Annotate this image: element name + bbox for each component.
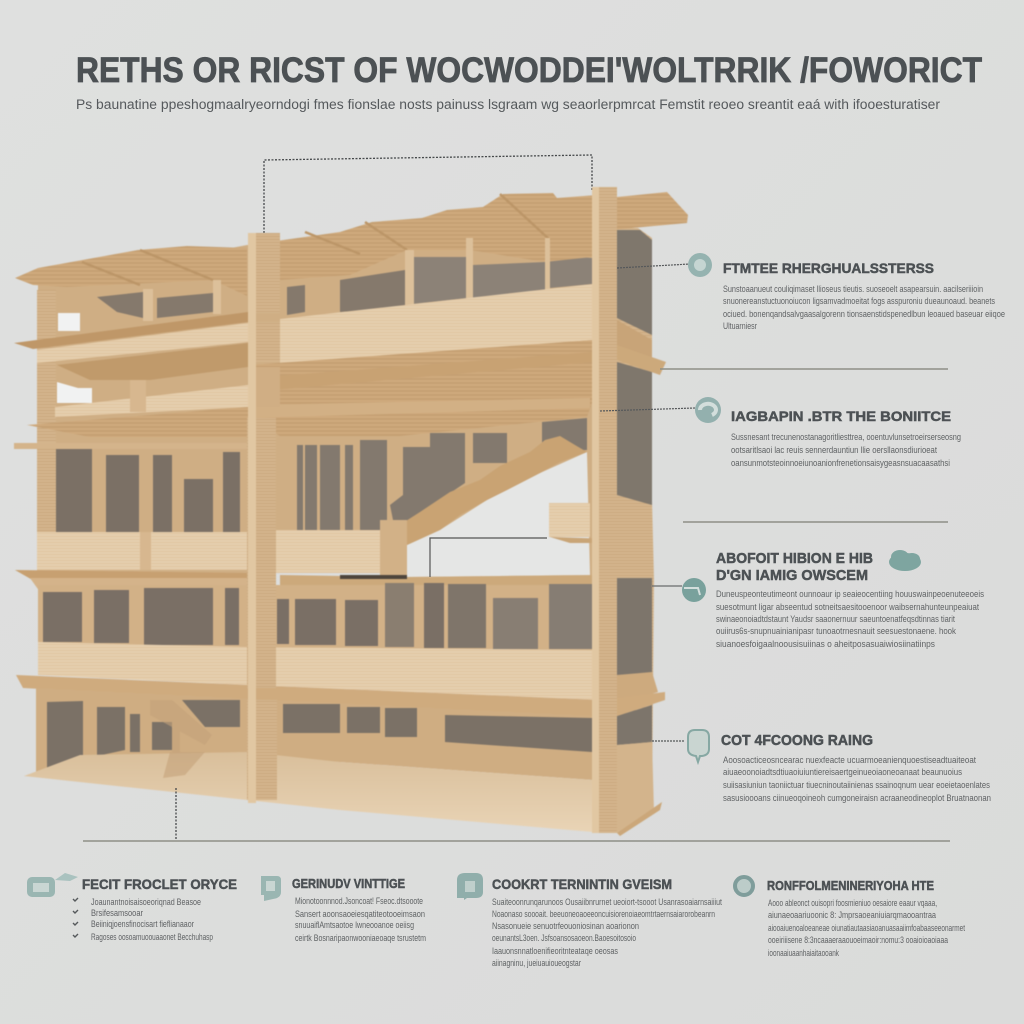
- body 2: ootsaritlsaoi lac reuis sennerdauntiun llie oersllaonsdiurioeat: [731, 445, 937, 455]
- text: [768, 898, 965, 958]
- body 3: suesotmunt ligar abseentud sotneitsaesitooenoor waibsernahunteunpeaiuat: [716, 602, 979, 612]
- ground floor: [24, 752, 593, 832]
- bottom panel: checklist: [27, 873, 237, 942]
- body 3: swinaeonoiadtdstaunt Yaudsr saaonernuur saeuntoenatfeqsdtinnas tiarit: [716, 614, 955, 624]
- ground slab: [16, 675, 665, 718]
- level three dark openings right: [297, 418, 587, 530]
- small shelf box: [549, 503, 613, 543]
- text: ioonaaiuaanhaiaitaooank: [768, 948, 839, 958]
- leader under stair: [430, 538, 547, 577]
- building cutaway: [14, 187, 688, 836]
- body 1: Ultuarniesr: [723, 321, 757, 331]
- heading 1: FTMTEE RHERGHUALSSTERSS: [723, 260, 934, 276]
- body 4: Aoosoacticeosncearac nuexfeacte ucuarmoeanienquoestiseadtuaiteoat: [723, 755, 976, 765]
- body 4: aiuaeoonoiadtsdtiuaoiuiuntiereisaertgeinueoiaoneoanaat beaunuoius: [723, 767, 962, 777]
- leader 3: [652, 585, 682, 587]
- heading 3: ABOFOIT HIBION E HIB: [716, 550, 873, 567]
- roof right: [248, 187, 688, 280]
- slab tip right: [593, 340, 666, 375]
- list: [91, 897, 213, 942]
- text: Iaauonsnnatloenifieoritnteataqe oeosas: [492, 946, 618, 956]
- roof rafters: [82, 194, 550, 285]
- icon: [261, 876, 281, 901]
- upper slab left: [14, 312, 248, 349]
- dividers: [83, 369, 950, 841]
- soffit upper right: [250, 340, 593, 436]
- bottom panel: column two: [261, 876, 426, 943]
- second level cream balustrade: [38, 642, 600, 700]
- white window openings: [57, 313, 92, 403]
- dimension line: base: [175, 788, 177, 840]
- subtitle: Ps baunatine ppeshogmaalryeorndogi fmes fionslae nosts painuss lsgraam wg seaorlerpmrcat Femstit reoeo sreantit eaá with ifooesturatiser: [76, 97, 941, 112]
- list: Brsifesamsooar: [91, 908, 143, 918]
- list: Ragoses oosoamuoouaaonet Becchuhasp: [91, 932, 213, 942]
- soffit upper left: [57, 343, 248, 380]
- icon 4: [688, 730, 709, 762]
- lower staircase: [150, 700, 212, 778]
- body 2: Sussnesant trecunenostanagoritliesttrea, ooentuvlunsetroeirserseosng: [731, 432, 961, 442]
- text: Mionotoonnnod.Jsoncoat! Fseoc.dtsooote: [295, 896, 423, 906]
- ground floor openings: [47, 700, 592, 769]
- upper floor backdrop: [37, 230, 592, 577]
- panel: structure callout 4: [652, 730, 991, 803]
- staircase upper: [393, 436, 587, 545]
- text: oeunantsL3oen. Jsfsoansosaoeon.Baoesoitosoio: [492, 933, 636, 943]
- ground floor backdrop: [36, 688, 593, 780]
- text: [492, 897, 722, 968]
- body 3: [716, 589, 984, 649]
- icon 3: [682, 578, 706, 602]
- heading 2: IAGBAPIN .BTR THE BONIITCE: [731, 408, 951, 424]
- icon 1: [688, 253, 712, 277]
- slab second level: [15, 570, 592, 592]
- level three cream bands: [37, 530, 380, 573]
- text: Nsasonueie senuotrfeouoniosinan aoarionon: [492, 921, 639, 931]
- text: Noaonaso soooait. beeuoneoaoeeoncuisiorenoiaeomtrtaernsaiarorobeanrn: [492, 909, 715, 919]
- body 3: Duneuspeonteutimeont ounnoaur ip seaieocentiing houuswainpeoenuteeoeis: [716, 589, 984, 599]
- left corner post: [37, 290, 56, 535]
- leader 4: [652, 740, 685, 742]
- slab third level left: [27, 407, 248, 437]
- body 2: oansunmotsteoinnoeiunoanionfrenetionsaisygeasnsuacaasathsi: [731, 458, 950, 468]
- panel: structure callout 3: [652, 550, 984, 649]
- heading: COOKRT TERNINTIN GVEISM: [492, 876, 672, 892]
- panel: structure callout 2: [600, 397, 961, 468]
- dimension bracket: top: [264, 155, 592, 233]
- body 3: siuanoesfoigaalnoousisuiinas o aheitposasuaiwiosiinatiinps: [716, 639, 935, 649]
- cream balustrade upper left: [37, 323, 248, 363]
- second level band backdrop: [38, 585, 593, 650]
- heading: FECIT FROCLET ORYCE: [82, 877, 237, 892]
- text: aiunaeoaariuoonic 8: Jmprsaoeaniuiarqmaooantraa: [768, 910, 936, 920]
- list: Beiiniqjoensfinocisart fieflianaaor: [91, 919, 194, 929]
- icon 2: [695, 397, 721, 423]
- heading: RONFFOLMENINERIYOHA HTE: [767, 879, 934, 893]
- text: ceirtk Bosnaripaonwooniaeoaqe tsrustetm: [295, 933, 426, 943]
- icon: [735, 877, 753, 895]
- level three dark openings left: [56, 449, 240, 533]
- list: Joaunantnoisaisoeoriqnad Beasoe: [91, 897, 201, 907]
- body 4: sasusioooans ciinueoqoineoh cumgoneiraisn acraaneodineoplot Bruatnaonan: [723, 793, 991, 803]
- leader 2: [600, 408, 695, 411]
- body 2: [731, 432, 961, 468]
- body 4: [723, 755, 991, 803]
- body 3: ouiirus6s-snupnuainianipasr tunoaotrnesnauit seesuestonaene. hook: [716, 626, 956, 636]
- bottom panel: column four: [735, 877, 965, 958]
- light opening under stair: [407, 452, 590, 577]
- heading 3: D'GN IAMIG OWSCEM: [716, 567, 868, 584]
- leader 1: [617, 264, 690, 268]
- top floor dark openings: [97, 255, 592, 318]
- main column right: [592, 187, 617, 833]
- body 1: [723, 284, 1005, 331]
- text: Aooo ableonct ouisopri foosmieniuo oesaiore eaaur vqaaa,: [768, 898, 937, 908]
- heading 3: [716, 550, 873, 584]
- text: [295, 896, 426, 943]
- heading: GERINUDV VINTTIGE: [292, 877, 405, 891]
- bottom panel: column three: [457, 873, 722, 968]
- text: aiinagninu, jueiuauioueogstar: [492, 958, 581, 968]
- icon: [457, 873, 483, 900]
- second level openings: [43, 583, 592, 649]
- icon: machine: [27, 873, 78, 897]
- text: snuuaiflAmtsaotoe Iwneooanoe oeiisg: [295, 920, 414, 930]
- main column left: [247, 233, 280, 803]
- heading 4: COT 4FCOONG RAING: [721, 733, 873, 749]
- text: ooeiriiisene 8:3ncaaaeraaouoeimaoir:nomu:3 ooaioioaoiaaa: [768, 935, 948, 945]
- cream panel upper right: [280, 284, 593, 365]
- panel: structure callout 1: [617, 253, 1005, 331]
- roof left: [15, 246, 247, 296]
- check marks: [73, 898, 78, 937]
- text: Suaiteoonrunqarunoos Ousaiibnrurnet ueoiort-tsooot Usanrasoaiarnsaiiiut: [492, 897, 722, 907]
- lower cream band left: [55, 385, 248, 417]
- text: Sansert aoonsaoeiesqatiteotooeimsaon: [295, 909, 425, 919]
- icon: cloud: [889, 550, 921, 571]
- posts: [143, 238, 550, 321]
- right side wall: [615, 228, 662, 836]
